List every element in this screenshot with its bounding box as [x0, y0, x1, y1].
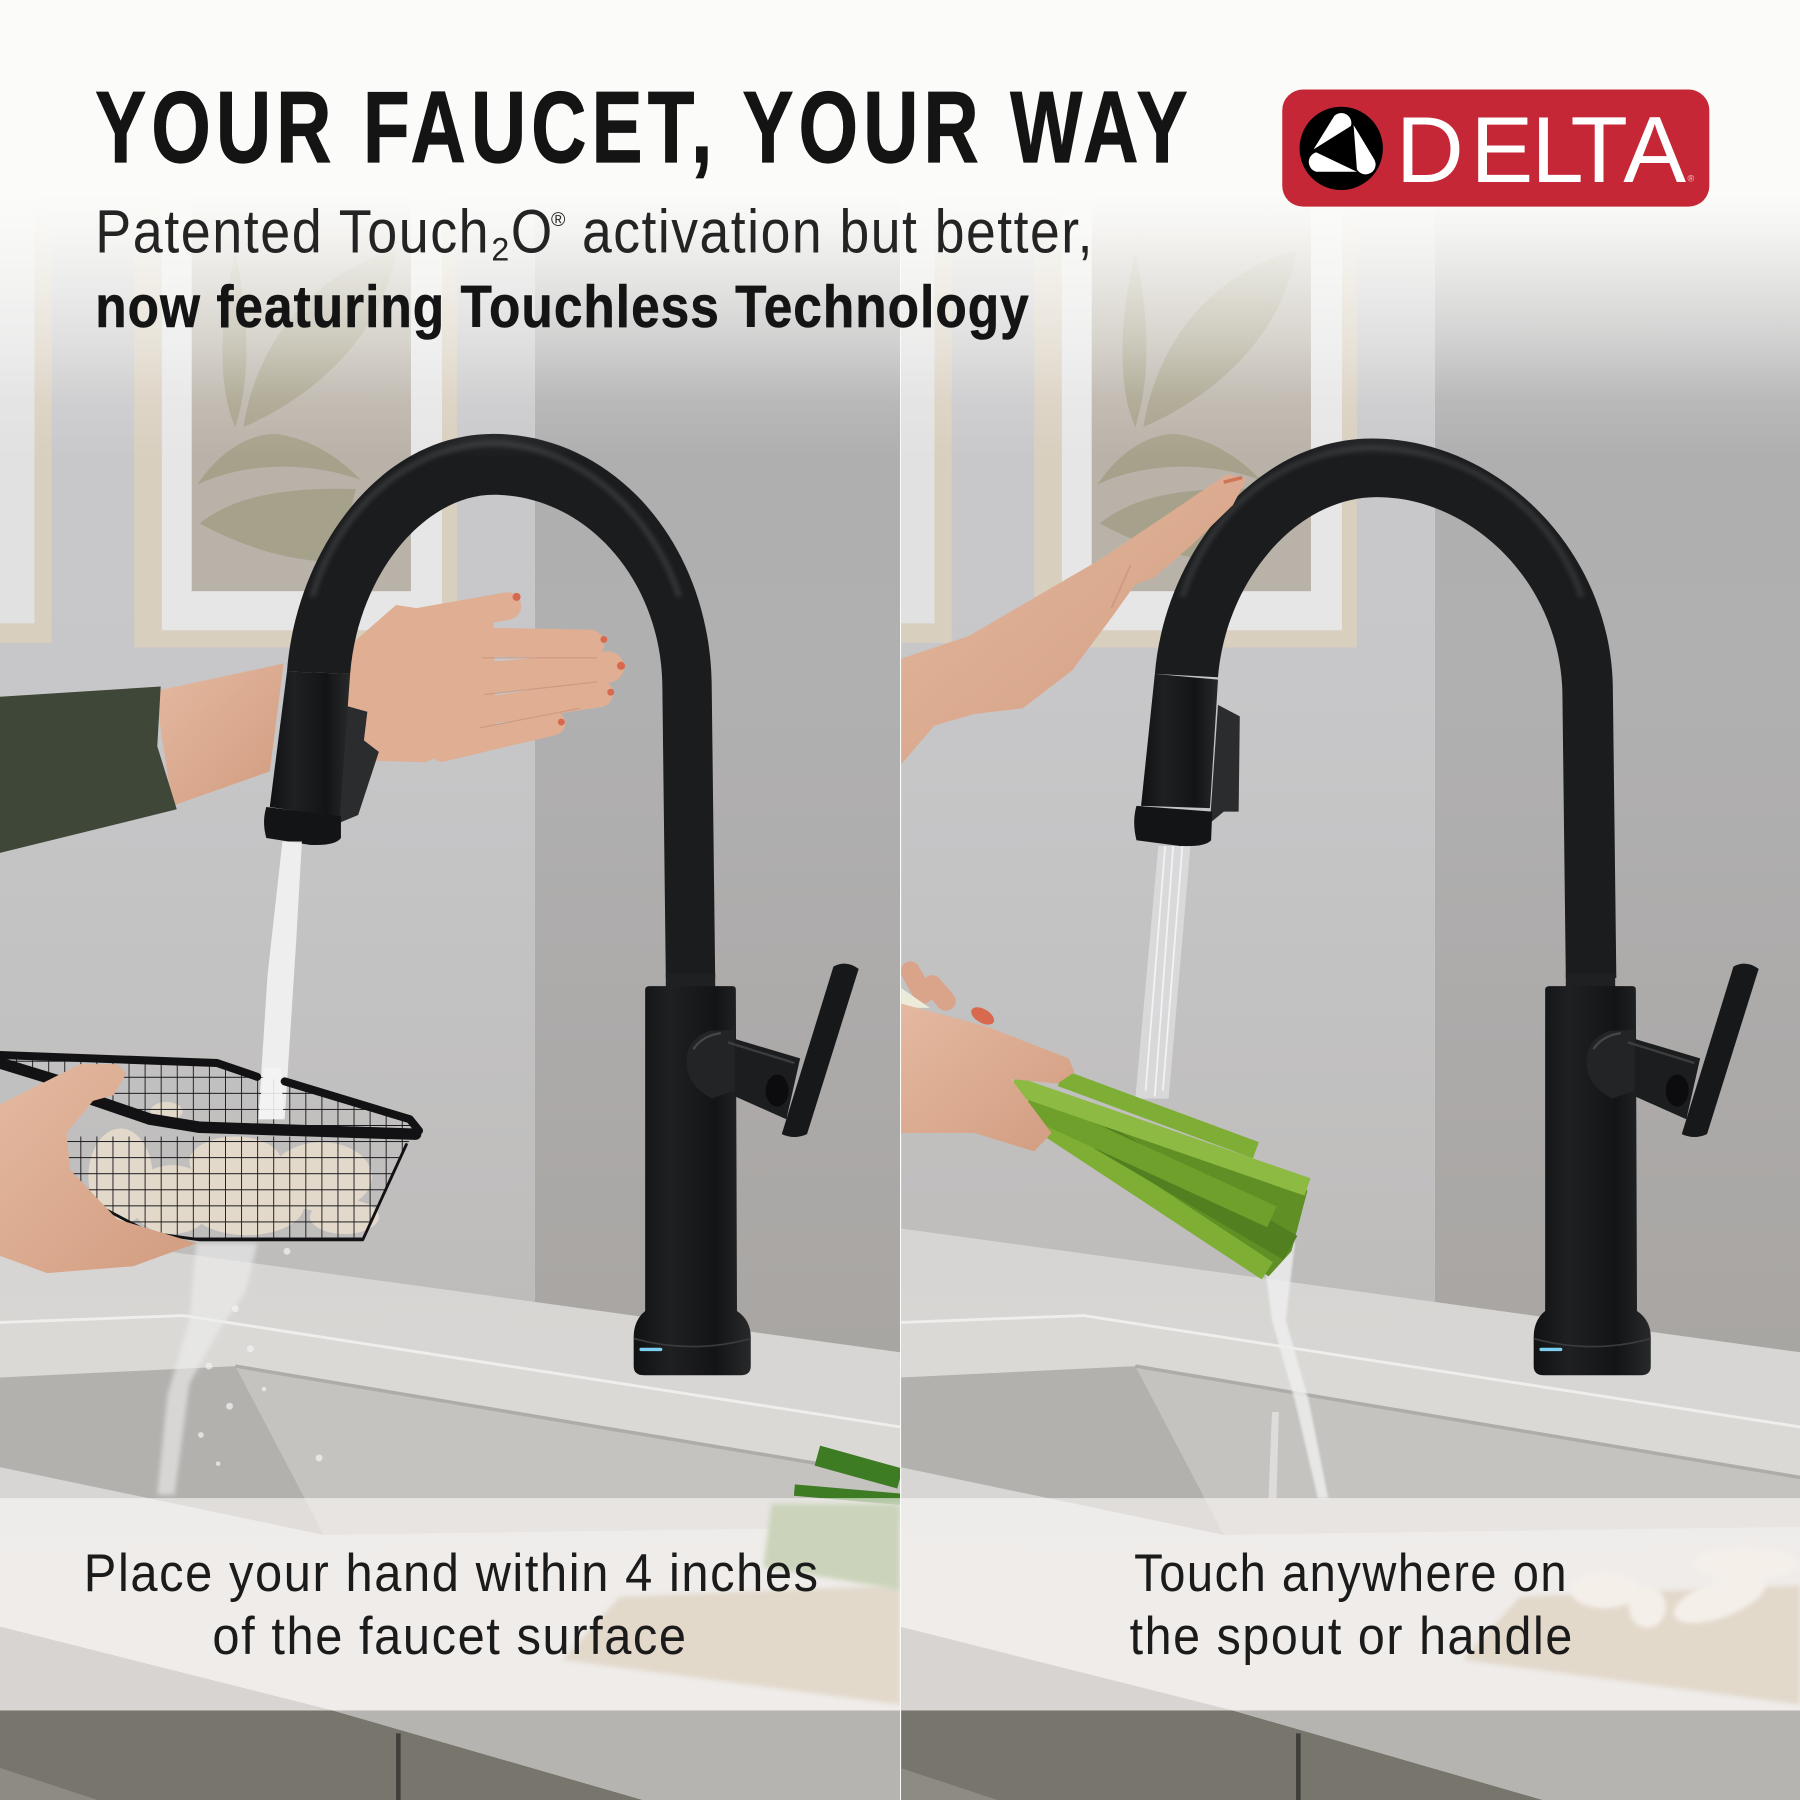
- open hand near faucet: [340, 593, 625, 762]
- subtitle line one: ®: [551, 209, 566, 231]
- left photo panel: [0, 232, 900, 1800]
- subtitle line one: activation but better,: [582, 198, 1094, 266]
- spout right: [1155, 439, 1616, 978]
- subtitle line one: O: [511, 198, 552, 266]
- title: YOUR FAUCET, YOUR WAY: [95, 72, 1193, 184]
- spray water right: [1135, 846, 1328, 1498]
- wire basket with mushrooms: [0, 1055, 421, 1240]
- subtitle line two: now featuring Touchless Technology: [95, 273, 1030, 340]
- caption left: of the faucet surface: [212, 1607, 688, 1666]
- subtitle line one: 2: [491, 232, 509, 268]
- right photo panel: [901, 232, 1800, 1800]
- registered mark: ®: [1688, 173, 1695, 183]
- mushrooms on cutting board: [1572, 1584, 1766, 1629]
- caption band left: [0, 1498, 900, 1710]
- green onions held in hand: [1012, 1078, 1308, 1277]
- lower hand holding onions: [900, 971, 1074, 1151]
- caption right: the spout or handle: [1130, 1607, 1574, 1666]
- spout left: [287, 434, 715, 978]
- caption left: Place your hand within 4 inches: [84, 1544, 820, 1603]
- Delta logo: [1282, 90, 1709, 207]
- room background: wall, framed art, countertop and sink: [0, 0, 900, 1800]
- faucet base and handle left: [634, 964, 859, 1375]
- sleeve and arm: [0, 664, 284, 853]
- logo mark: [1300, 107, 1383, 190]
- spray head right: [1134, 674, 1240, 846]
- caption right: Touch anywhere on: [1134, 1544, 1568, 1603]
- water stream left: [157, 841, 323, 1495]
- subtitle line one: Patented Touch: [95, 198, 490, 266]
- upper hand touching the spout: [900, 474, 1247, 766]
- hand holding basket: [0, 1064, 196, 1273]
- caption right: [1130, 1544, 1574, 1666]
- spray head left: [264, 672, 379, 845]
- faucet base and handle right: [1534, 964, 1759, 1375]
- caption left: [84, 1544, 820, 1666]
- caption band right: [901, 1498, 1800, 1710]
- top white fade: [0, 0, 1800, 488]
- room background repeated for the right panel: [901, 232, 1800, 1800]
- logo wordmark: DELTA: [1396, 97, 1686, 202]
- green onions on counter: [763, 1456, 900, 1590]
